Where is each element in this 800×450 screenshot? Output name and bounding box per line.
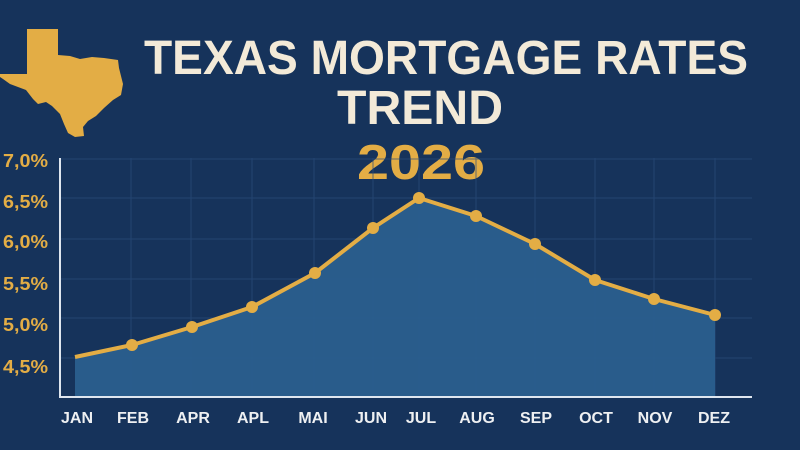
- x-axis labels: APR: [176, 410, 210, 427]
- y-axis labels: 7,0%: [3, 151, 48, 171]
- x-axis labels: APL: [237, 410, 269, 427]
- x-axis labels: MAI: [298, 410, 328, 427]
- x-axis labels: JAN: [61, 410, 93, 427]
- y-axis labels: 4,5%: [3, 357, 48, 377]
- x-axis labels: OCT: [579, 410, 613, 427]
- x-axis labels: SEP: [520, 410, 552, 427]
- y-axis labels: [3, 151, 48, 377]
- x-axis labels: NOV: [638, 410, 673, 427]
- y-axis labels: 5,5%: [3, 274, 48, 294]
- title: TEXAS MORTGAGE RATES: [144, 32, 748, 85]
- x-axis labels: JUN: [355, 410, 387, 427]
- x-axis labels: JUL: [406, 410, 436, 427]
- y-axis labels: 6,5%: [3, 192, 48, 212]
- x-axis labels: [61, 410, 730, 427]
- x-axis labels: FEB: [117, 410, 149, 427]
- title: TREND: [337, 82, 503, 135]
- x-axis labels: DEZ: [698, 410, 730, 427]
- icon: texas map: [0, 29, 123, 137]
- y-axis labels: 6,0%: [3, 232, 48, 252]
- line chart: [59, 158, 752, 398]
- title: 2026: [357, 136, 485, 190]
- y-axis labels: 5,0%: [3, 315, 48, 335]
- title: [144, 32, 748, 190]
- x-axis labels: AUG: [459, 410, 495, 427]
